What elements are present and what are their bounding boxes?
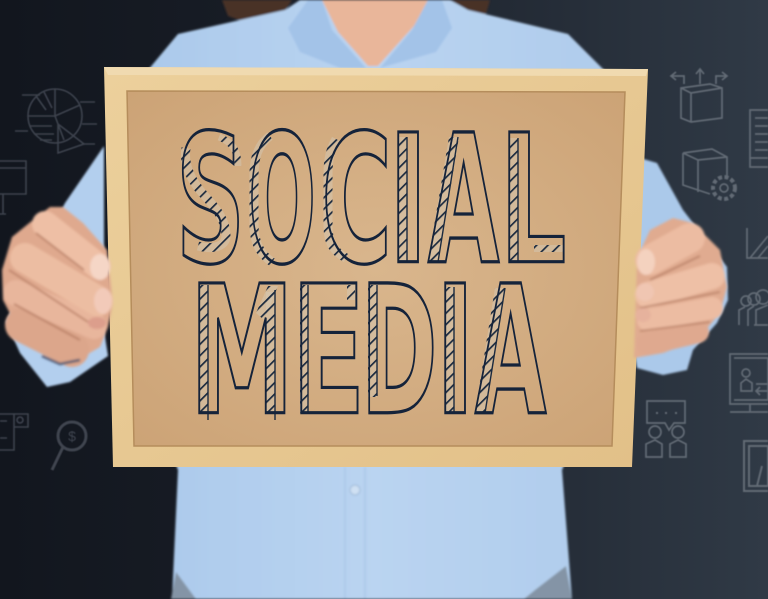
- word: SOCIAL: A: [428, 97, 500, 304]
- right hand: [634, 218, 727, 358]
- frame highlight strip: [104, 67, 648, 76]
- word: MEDIA: [190, 247, 547, 455]
- hatching: letter shading: [185, 136, 563, 420]
- title: SOCIAL MEDIA lettering: [176, 96, 567, 455]
- wooden board: [104, 67, 648, 467]
- word: MEDIA: I: [436, 248, 475, 455]
- icon: money magnifier: $: [68, 428, 76, 444]
- word: SOCIAL: [176, 96, 567, 304]
- board frame: [104, 67, 648, 467]
- word: MEDIA: A: [475, 248, 547, 455]
- icon: team: [739, 290, 768, 326]
- word: SOCIAL: L: [500, 97, 567, 304]
- hair: [222, 0, 490, 24]
- icon: presentation board: [0, 161, 26, 214]
- icon: growth chart: [747, 228, 768, 258]
- left hand: [2, 207, 113, 364]
- icon: document list: [750, 110, 768, 167]
- collar: [288, 0, 452, 68]
- word: MEDIA: D: [361, 248, 438, 455]
- cork panel: [127, 91, 625, 446]
- word: MEDIA: E: [291, 247, 365, 455]
- word: SOCIAL: S: [176, 96, 245, 304]
- right sleeve: [625, 158, 728, 375]
- icon: pie chart: [15, 89, 97, 153]
- shirt button: [350, 485, 360, 495]
- word: MEDIA: M: [190, 248, 294, 455]
- left icons: [0, 89, 97, 470]
- icon: money magnifier: [52, 422, 86, 470]
- placket shading: [345, 467, 365, 599]
- shirt torso: [110, 0, 640, 599]
- icon: search listing: [0, 414, 28, 450]
- icon: cube with gear: [683, 149, 735, 199]
- icon: chat between two people: [646, 401, 686, 457]
- jeans: [171, 566, 572, 599]
- word: SOCIAL: O: [248, 97, 316, 304]
- icon: box with arrows: [671, 69, 727, 122]
- right icons: [646, 69, 768, 491]
- word: SOCIAL: C: [321, 96, 392, 304]
- icon: monitor with person: [730, 354, 768, 412]
- icon: framed chart: [744, 441, 768, 491]
- word: SOCIAL: I: [389, 97, 428, 304]
- left sleeve: [6, 146, 108, 387]
- neck skin: [322, 0, 428, 66]
